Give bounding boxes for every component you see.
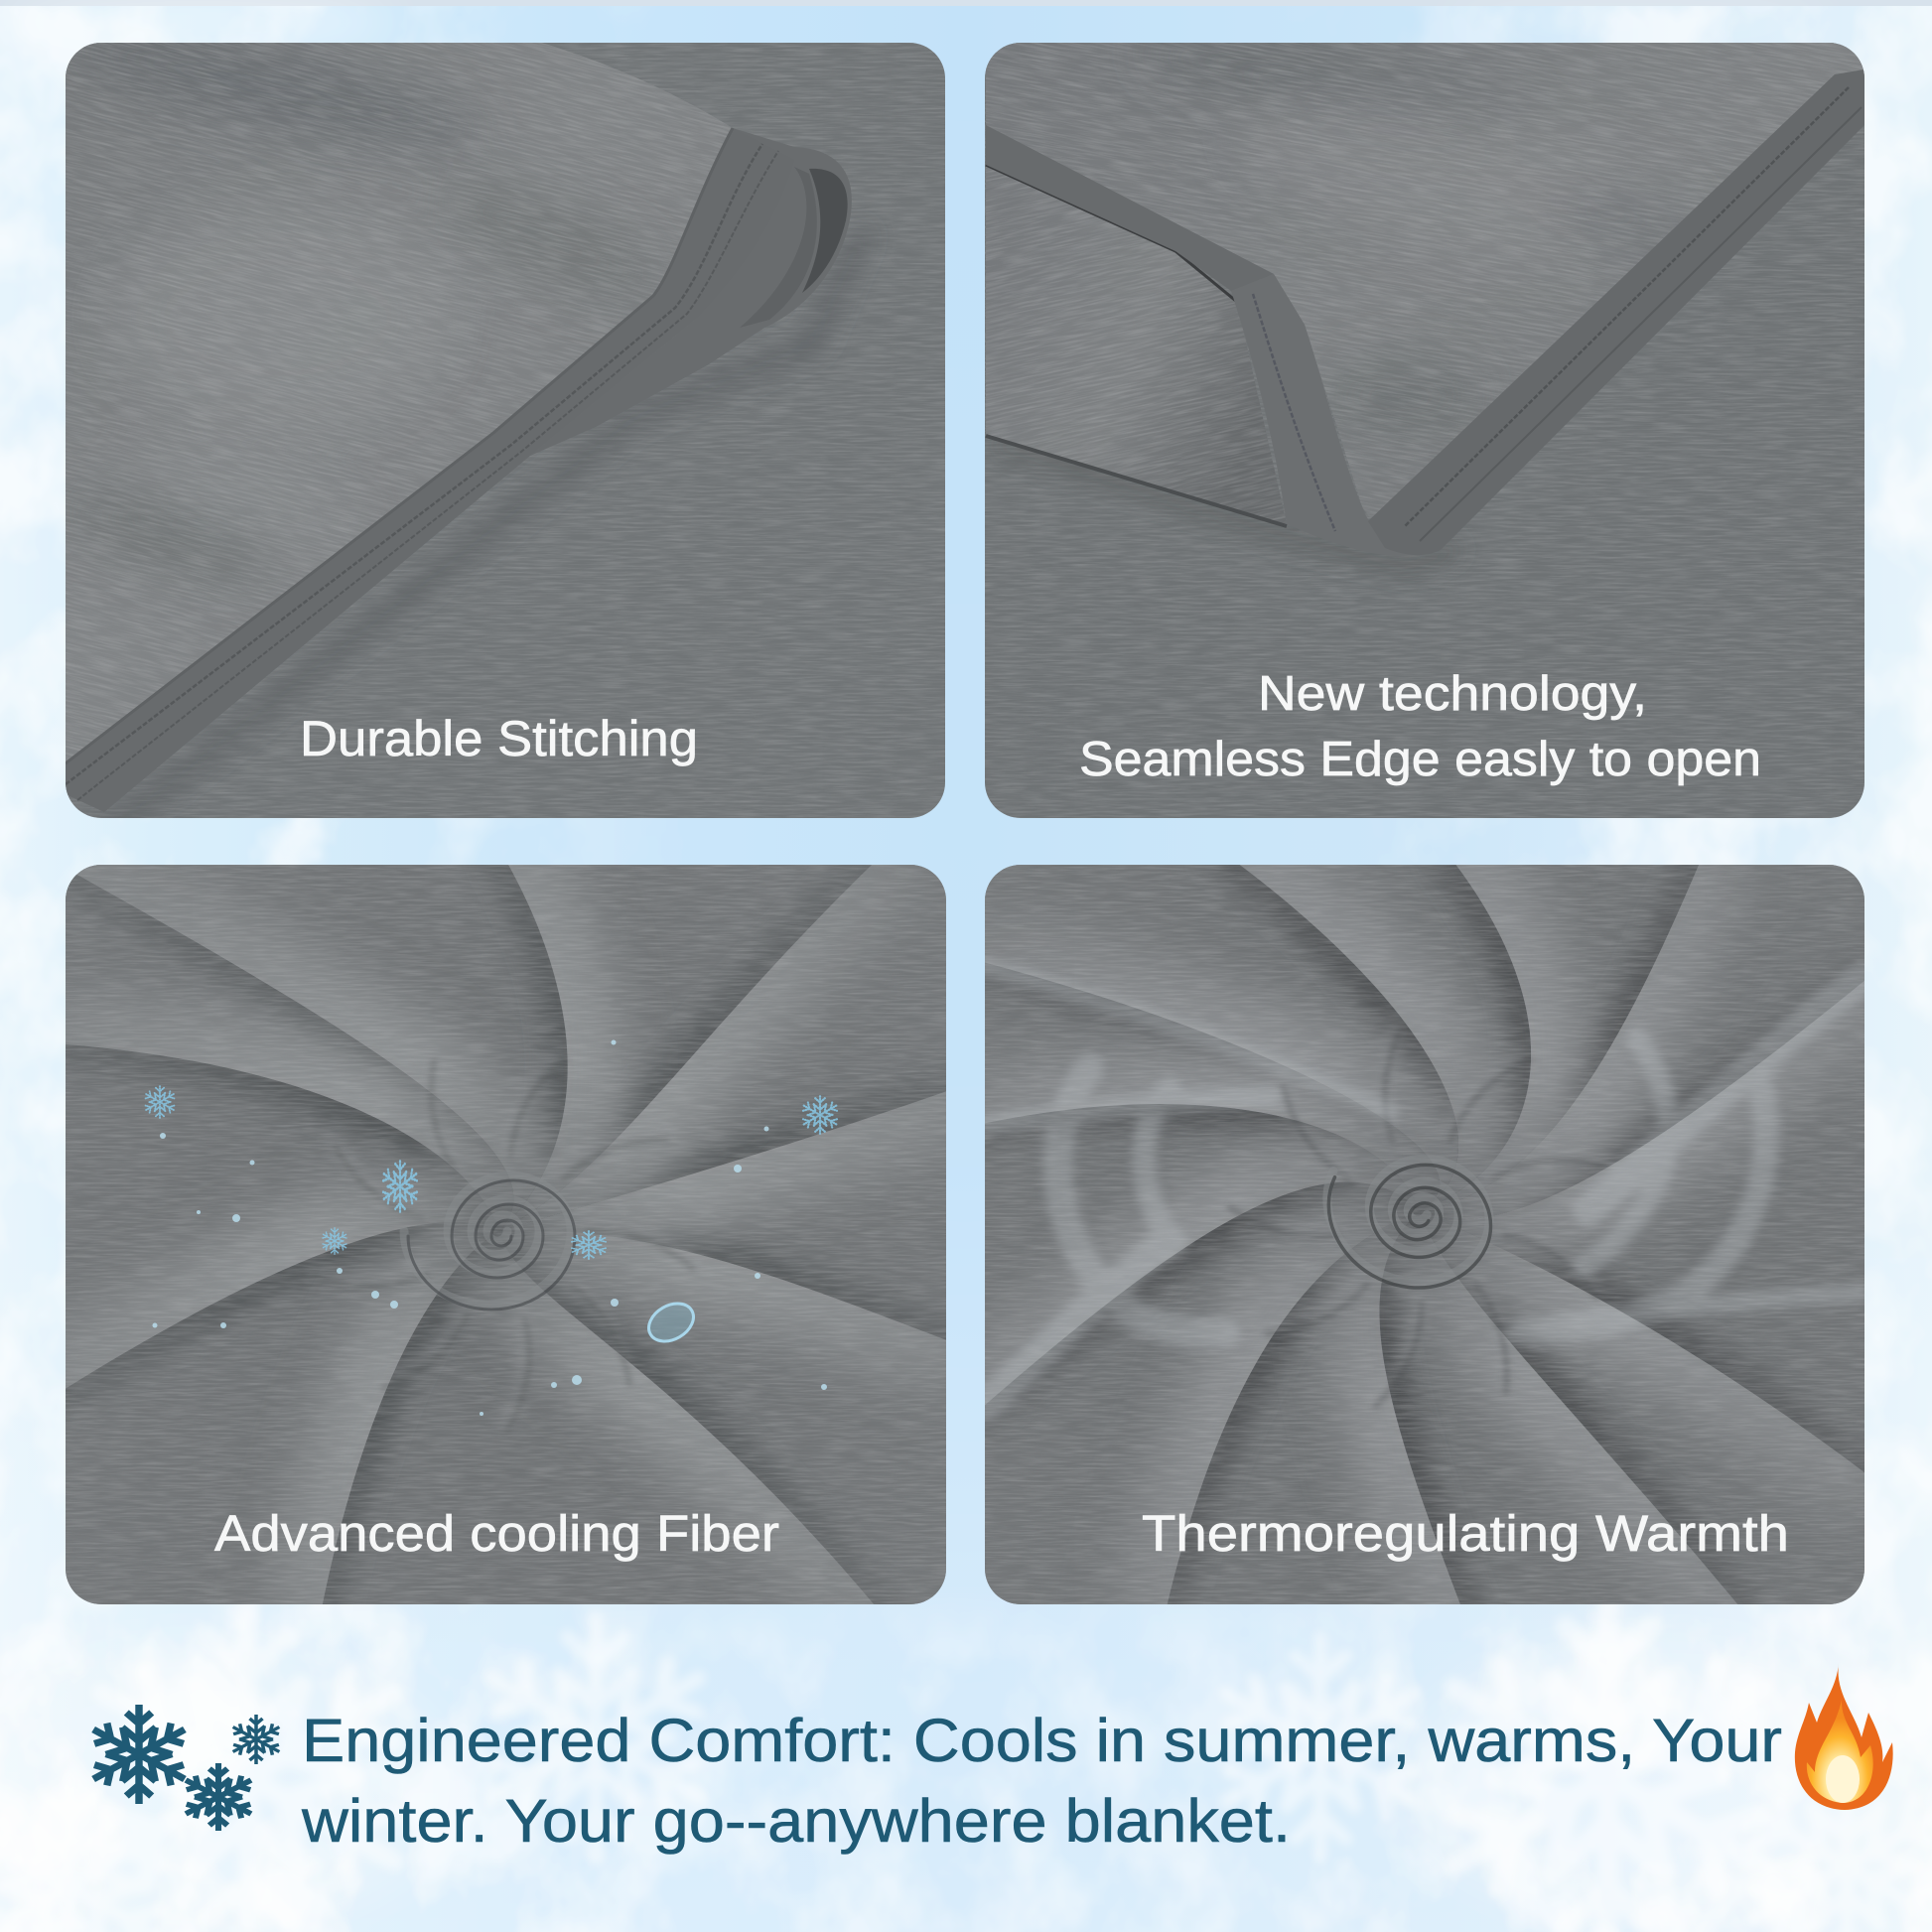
panel: seamless edge	[823, 0, 1932, 841]
ice crystals and droplets	[143, 1040, 841, 1416]
panel: advanced cooling fiber	[0, 616, 1115, 1847]
swirl centre	[1301, 1121, 1512, 1314]
swirl centre	[404, 1175, 575, 1310]
label: durable stitching: Durable Stitching	[300, 711, 698, 766]
icon: flame	[1795, 1663, 1893, 1810]
stitched hems	[986, 69, 1864, 556]
swirl blades	[40, 844, 973, 1628]
caption text	[301, 1707, 1782, 1855]
panel: thermoregulating warmth	[784, 576, 1932, 1847]
inner folds around the swirl	[1186, 988, 1653, 1453]
thermal heat rings and beams	[986, 966, 1863, 1405]
icon: snowflake cluster	[85, 1705, 284, 1831]
label: new technology: New technology,	[1258, 667, 1647, 721]
fabric top sheet	[823, 0, 1932, 841]
inner folds around the swirl	[312, 1049, 693, 1431]
panel: durable stitching	[0, 0, 1218, 1119]
swirl blades	[968, 844, 1886, 1628]
stitched hem	[66, 128, 794, 812]
fabric under-sheet	[846, 43, 1435, 631]
label: new technology	[1079, 667, 1761, 786]
caption text: winter. Your go--anywhere blanket.	[301, 1787, 1291, 1855]
label: new technology: Seamless Edge easly to open	[1079, 733, 1761, 786]
fabric loop fold	[530, 128, 852, 456]
caption text: Engineered Comfort: Cools in summer, warms, Your	[302, 1707, 1782, 1774]
fabric sheet	[66, 43, 731, 761]
label: advanced cooling fiber: Advanced cooling Fiber	[214, 1505, 779, 1562]
label: thermoregulating warmth: Thermoregulating Warmth	[1142, 1505, 1789, 1562]
